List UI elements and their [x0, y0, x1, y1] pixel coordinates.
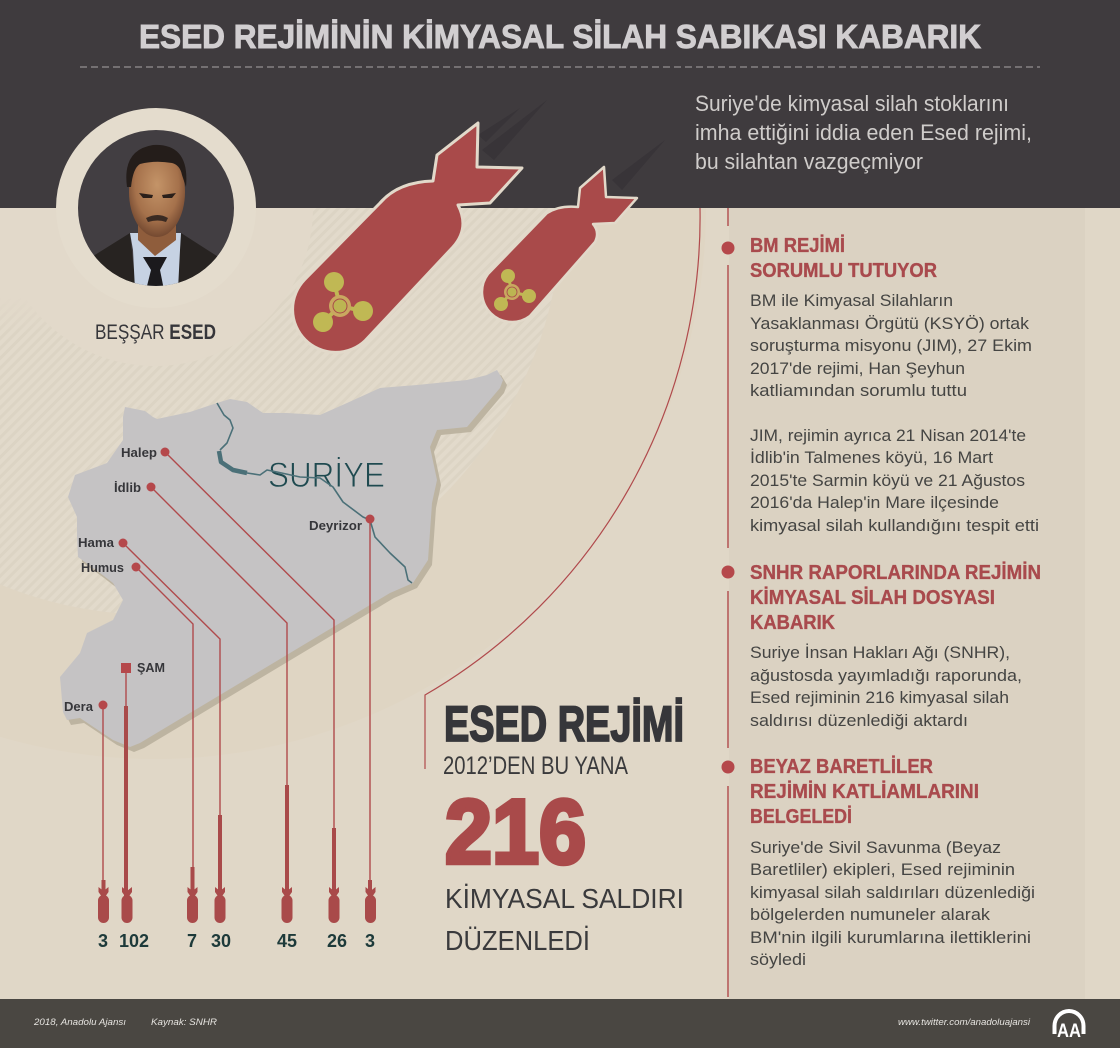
attack counts: 30	[211, 931, 231, 951]
heading: BEYAZ BARETLİLER	[750, 755, 934, 778]
attack counts	[98, 931, 375, 951]
attack counts: 7	[187, 931, 197, 951]
logo: AA	[1054, 1011, 1084, 1042]
body text: 2016'da Halep'in Mare ilçesinde	[750, 493, 999, 512]
city labels	[64, 446, 362, 714]
source: Kaynak: SNHR	[151, 1017, 217, 1028]
bomb shadows	[478, 100, 665, 190]
attack counts: 3	[365, 931, 375, 951]
body text	[750, 643, 1022, 730]
logo: AA: AA	[1057, 1021, 1081, 1042]
body text: soruşturma misyonu (JIM), 27 Ekim	[750, 336, 1032, 355]
city labels: İdlib	[114, 480, 141, 495]
city labels: Hama	[78, 536, 115, 550]
city labels: Deyrizor	[309, 519, 362, 533]
timeline	[722, 208, 734, 997]
body text: JIM, rejimin ayrıca 21 Nisan 2014'te	[750, 426, 1026, 445]
body text: Esed rejiminin 216 kimyasal silah	[750, 688, 1009, 707]
map of Syria	[60, 370, 507, 752]
attack counts: 102	[119, 931, 149, 951]
red arc line	[425, 208, 700, 769]
city labels: Halep	[121, 446, 157, 460]
section: Beyaz Baretliler	[750, 755, 1035, 969]
body text: Yasaklanması Örgütü (KSYÖ) ortak	[750, 314, 1030, 333]
body text	[750, 838, 1035, 969]
portrait caption: BEŞŞAR ESED	[95, 320, 216, 344]
heading: SORUMLU TUTUYOR	[750, 260, 938, 282]
footer	[0, 999, 1120, 1048]
heading	[750, 234, 938, 282]
intro text: bu silahtan vazgeçmiyor	[695, 149, 923, 174]
body text: İdlib'in Talmenes köyü, 16 Mart	[750, 448, 993, 467]
chemical symbol	[494, 269, 536, 311]
twitter url: www.twitter.com/anadoluajansi	[898, 1017, 1031, 1028]
body text: Baretliler) ekipleri, Esed rejiminin	[750, 860, 1015, 879]
copyright: 2018, Anadolu Ajansı	[33, 1017, 126, 1028]
heading: BELGELEDİ	[750, 805, 852, 828]
city labels: Dera	[64, 700, 94, 714]
body text: kimyasal silah kullandığını tespit etti	[750, 516, 1039, 535]
intro text	[695, 91, 1032, 174]
attack counts: 26	[327, 931, 347, 951]
city markers	[98, 448, 374, 710]
section: SNHR	[750, 561, 1041, 730]
portrait: Beşşar Esed	[67, 119, 245, 297]
section: BM	[750, 234, 1039, 535]
attack counts: 45	[277, 931, 297, 951]
number: 216: 216	[445, 782, 586, 883]
heading	[750, 561, 1041, 634]
body text: bölgelerden numuneler alarak	[750, 905, 991, 924]
label: carried out: DÜZENLEDİ	[445, 925, 590, 956]
body text: 2015'te Sarmin köyü ve 21 Ağustos	[750, 471, 1025, 490]
heading: KABARIK	[750, 612, 836, 634]
body text: saldırısı düzenlediği aktardı	[750, 711, 968, 730]
body text: Suriye'de Sivil Savunma (Beyaz	[750, 838, 1001, 857]
heading: BM REJİMİ	[750, 234, 845, 257]
body text: BM ile Kimyasal Silahların	[750, 291, 953, 310]
label: chemical attacks: KİMYASAL SALDIRI	[445, 883, 684, 914]
body text: ağustosda yayımladığı raporunda,	[750, 666, 1022, 685]
heading: REJİMİN KATLİAMLARINI	[750, 780, 979, 803]
heading: SNHR RAPORLARINDA REJİMİN	[750, 561, 1041, 584]
icon: large chemical bomb	[293, 123, 522, 352]
Euphrates river	[217, 403, 412, 583]
header band	[0, 0, 1120, 208]
dashed divider	[80, 66, 1040, 68]
label: Esed rejimi: ESED REJİMİ	[444, 696, 684, 752]
country label: SURİYE	[268, 456, 385, 495]
city labels: Humus	[81, 561, 124, 575]
city leader lines	[103, 452, 370, 885]
body text: Suriye İnsan Hakları Ağı (SNHR),	[750, 643, 1010, 662]
city labels: ŞAM	[137, 661, 165, 675]
intro text: imha ettiğini iddia eden Esed rejimi,	[695, 120, 1032, 145]
heading: KİMYASAL SİLAH DOSYASI	[750, 586, 995, 609]
title: ESED REJİMİNİN KİMYASAL SİLAH SABIKASI KABARIK	[139, 18, 981, 55]
mini bombs	[98, 887, 376, 923]
heading	[750, 755, 979, 828]
icon: small chemical bomb	[482, 167, 637, 322]
body text: kimyasal silah saldırıları düzenlediği	[750, 883, 1035, 902]
chemical symbol	[313, 272, 373, 332]
body text: 2017'de rejimi, Han Şeyhun	[750, 359, 965, 378]
body text: katliamından sorumlu tuttu	[750, 381, 967, 400]
label: since 2012: 2012’DEN BU YANA	[443, 752, 628, 780]
headline statistic	[443, 696, 684, 956]
intro text: Suriye'de kimyasal silah stoklarını	[695, 91, 1009, 116]
body text	[750, 291, 1039, 535]
attack count bars	[102, 706, 372, 897]
body text: BM'nin ilgili kurumlarına ilettiklerini	[750, 928, 1031, 947]
body text: söyledi	[750, 950, 806, 969]
attack counts: 3	[98, 931, 108, 951]
